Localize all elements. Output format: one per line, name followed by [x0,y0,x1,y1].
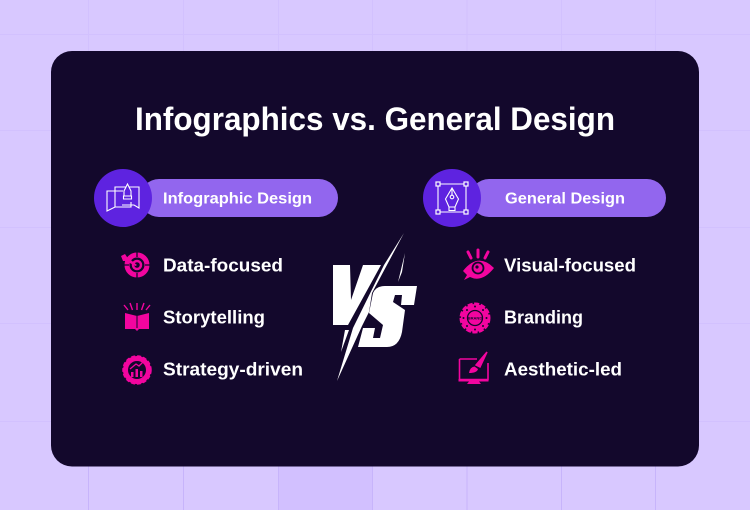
lightning bolt [337,233,404,381]
icon: open book with sparks [124,303,150,331]
item: visual-focused [463,250,636,280]
icon: chart in gear [123,356,151,384]
small sparks [341,253,405,352]
list: general design traits [458,250,636,384]
icon: monitor with paintbrush [458,352,488,384]
item: branding [461,304,583,332]
V letter [333,265,381,325]
S letter [358,286,417,347]
pill: infographic design [140,179,338,217]
icon: VS lightning emblem [333,233,417,381]
icon: target with arrow [121,252,150,278]
header: infographic design [94,169,338,227]
item: strategy-driven: Strategy-driven [163,360,303,380]
pill: general design: General Design [505,190,625,208]
list: infographic traits [121,252,303,384]
item: aesthetic-led [458,352,622,384]
icon: brand badge: BRAND [468,316,482,320]
header: general design [423,169,666,227]
title: Infographics vs. General Design [135,101,615,137]
icon: eye with rays [463,250,494,280]
pill: general design [470,179,666,217]
item: aesthetic-led: Aesthetic-led [504,360,622,380]
panel: dark card [51,51,699,466]
icon: pen nib in bounding box [423,169,481,227]
item: strategy-driven [123,356,303,384]
item: data-focused: Data-focused [163,256,283,276]
item: visual-focused: Visual-focused [504,256,636,276]
item: storytelling [124,303,265,331]
item: branding: Branding [504,308,583,328]
pill: infographic design: Infographic Design [163,190,312,208]
icon: speech bubbles with pen nib [94,169,152,227]
item: data-focused [121,252,283,278]
item: storytelling: Storytelling [163,308,265,328]
